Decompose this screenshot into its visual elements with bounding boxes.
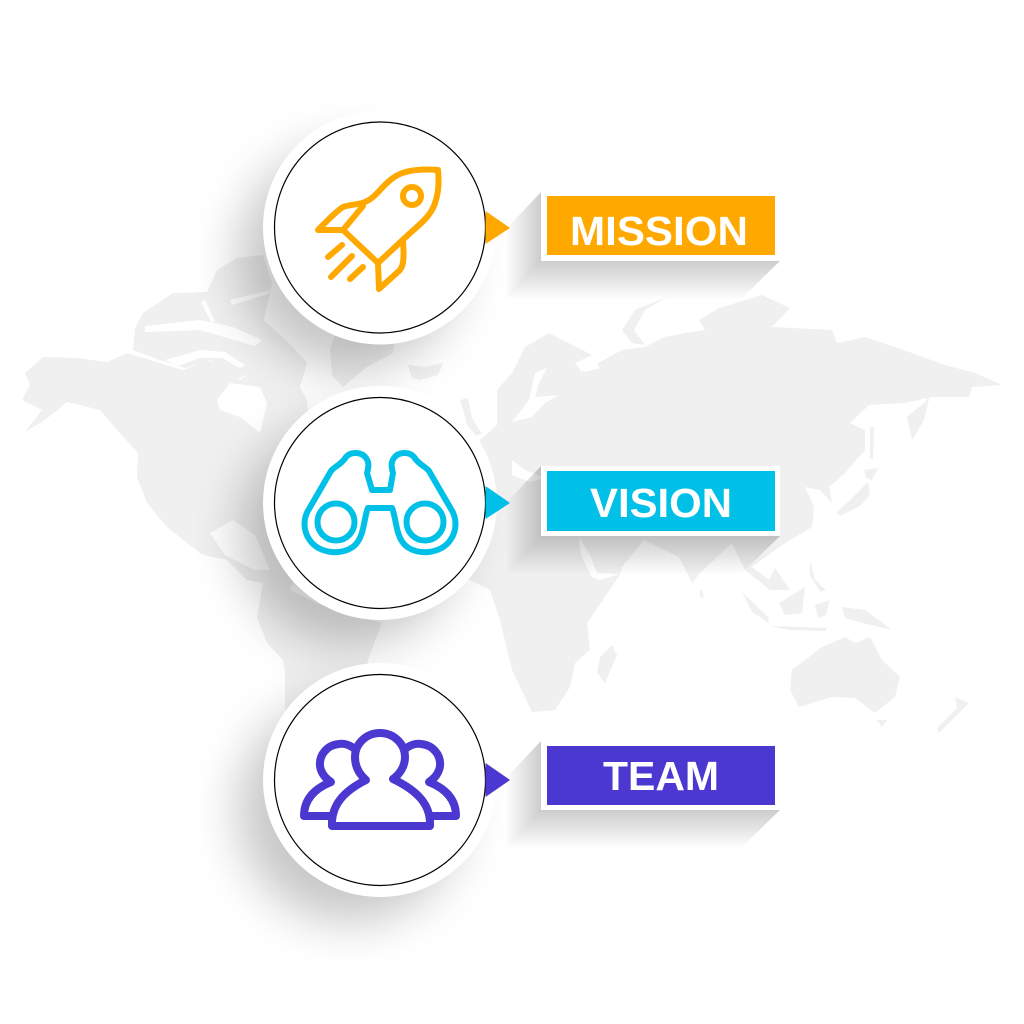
team label: TEAM: [603, 753, 719, 799]
vision label: [541, 466, 780, 536]
team circle: [263, 663, 497, 897]
world map background: [22, 255, 1002, 800]
vision arrow: [486, 486, 510, 519]
map water cut-outs: [145, 290, 620, 580]
mission label: [541, 192, 780, 261]
panel: vision: [263, 386, 780, 620]
vision circle: [263, 386, 497, 620]
vision label: VISION: [590, 480, 732, 526]
mission label shadow: [505, 192, 780, 300]
mission arrow: [486, 211, 510, 244]
icon: rocket: [318, 170, 439, 289]
icon: team people: [304, 733, 456, 826]
circle shadows: [238, 146, 462, 922]
panel: team: [263, 663, 780, 897]
panel: mission: [263, 110, 780, 344]
mission circle: [263, 110, 497, 344]
vision label shadow: [505, 466, 780, 575]
team label: [541, 741, 780, 810]
icon: binoculars: [304, 453, 456, 552]
team label shadow: [505, 741, 780, 849]
team arrow: [486, 763, 510, 797]
mission label: MISSION: [570, 208, 748, 254]
